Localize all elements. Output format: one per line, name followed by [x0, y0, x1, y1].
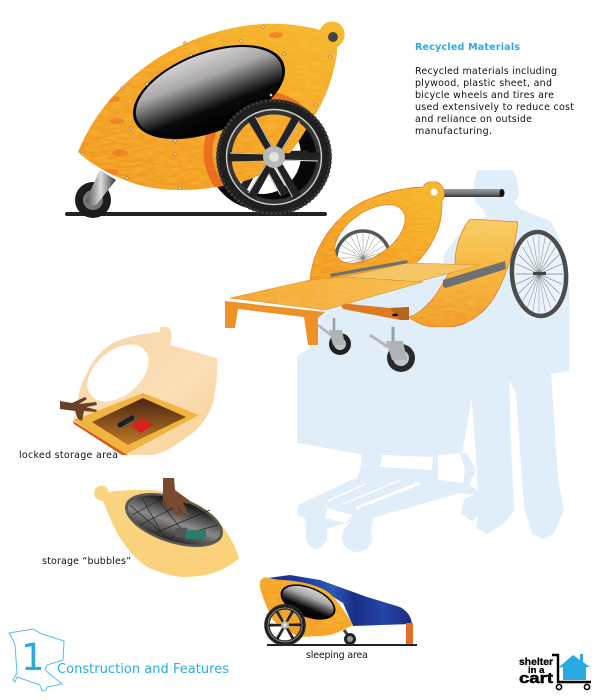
- paragraph: and reliance on outside: [415, 114, 532, 125]
- paragraph: bicycle wheels and tires are: [415, 90, 554, 101]
- eyelet: [328, 32, 338, 42]
- plywood body: [78, 22, 345, 190]
- logo wordmark: cart: [519, 670, 553, 687]
- curved rear panel: [409, 219, 518, 327]
- wheel: [265, 605, 305, 645]
- silhouette: man: [440, 171, 568, 538]
- caster: [344, 630, 356, 645]
- paragraph: [415, 66, 574, 137]
- leaf panel: [94, 486, 239, 577]
- large bicycle wheel: [509, 230, 569, 318]
- hand reaching in: [163, 478, 190, 515]
- silhouette: man and shopping cart: [298, 171, 568, 551]
- top cart illustration: [65, 22, 345, 218]
- section marker and title: [9, 629, 229, 691]
- wood knots and wheel-arch stain: [104, 32, 308, 188]
- pale panel with window: [73, 327, 217, 455]
- label: storage “bubbles”: [42, 556, 131, 567]
- logo cart: [552, 655, 591, 690]
- logo wordmark: [519, 656, 553, 687]
- front spoked wheel: [218, 100, 330, 214]
- body bolts: [82, 26, 331, 189]
- tray interior: [92, 398, 186, 445]
- logo wordmark: shelter: [519, 656, 553, 668]
- stored items: [175, 528, 206, 539]
- illustration: locked storage area: [19, 327, 217, 461]
- plywood body: [260, 577, 353, 637]
- cart outline icon: [9, 629, 64, 691]
- illustration: sleeping area: [260, 575, 417, 661]
- hand on lid: [60, 397, 97, 421]
- wheel behind side panel: [336, 231, 390, 285]
- window bubble: [120, 26, 298, 158]
- caster left: [318, 318, 351, 355]
- silhouette: cart frame and wheels: [298, 453, 480, 551]
- silhouette: shopping cart basket: [298, 270, 472, 454]
- flashlight: [120, 418, 132, 425]
- caster right: [370, 327, 415, 372]
- logo: shelter in a cart: [519, 654, 591, 690]
- sliding floor panel: [343, 263, 480, 283]
- heading: Recycled Materials: [415, 42, 520, 53]
- cargo net: [130, 496, 218, 540]
- main deck: [230, 277, 423, 310]
- tray front edge: [73, 421, 127, 455]
- window: [275, 577, 341, 627]
- section number: 1: [21, 636, 45, 679]
- red box: [131, 418, 153, 433]
- handle bar: [441, 189, 504, 197]
- text block: recycled materials: [415, 42, 574, 137]
- label: sleeping area: [306, 650, 368, 661]
- rear wheel behind the body: [215, 108, 309, 202]
- paragraph: manufacturing.: [415, 126, 492, 137]
- exploded cart illustration: [225, 182, 569, 372]
- caster wheel: [75, 170, 116, 218]
- logo wordmark: in a: [528, 665, 545, 676]
- rear support: [406, 623, 413, 645]
- metal rails: [330, 260, 506, 288]
- ground line: [267, 644, 417, 646]
- storage tray frame: [73, 393, 199, 456]
- eyelet hole: [430, 188, 438, 196]
- underside connector: [340, 303, 409, 320]
- logo house: [558, 654, 590, 680]
- storage opening: [118, 482, 230, 558]
- paragraph: plywood, plastic sheet, and: [415, 78, 552, 89]
- illustration: storage bubbles: [42, 478, 239, 577]
- paragraph: used extensively to reduce cost: [415, 102, 574, 113]
- section title: Construction and Features: [57, 662, 229, 677]
- deck legs: [225, 301, 325, 345]
- blue tarp: [268, 575, 412, 626]
- side panel with window opening: [310, 182, 444, 290]
- label: locked storage area: [19, 450, 118, 461]
- paragraph: Recycled materials including: [415, 66, 557, 77]
- ground shadow: [65, 212, 327, 216]
